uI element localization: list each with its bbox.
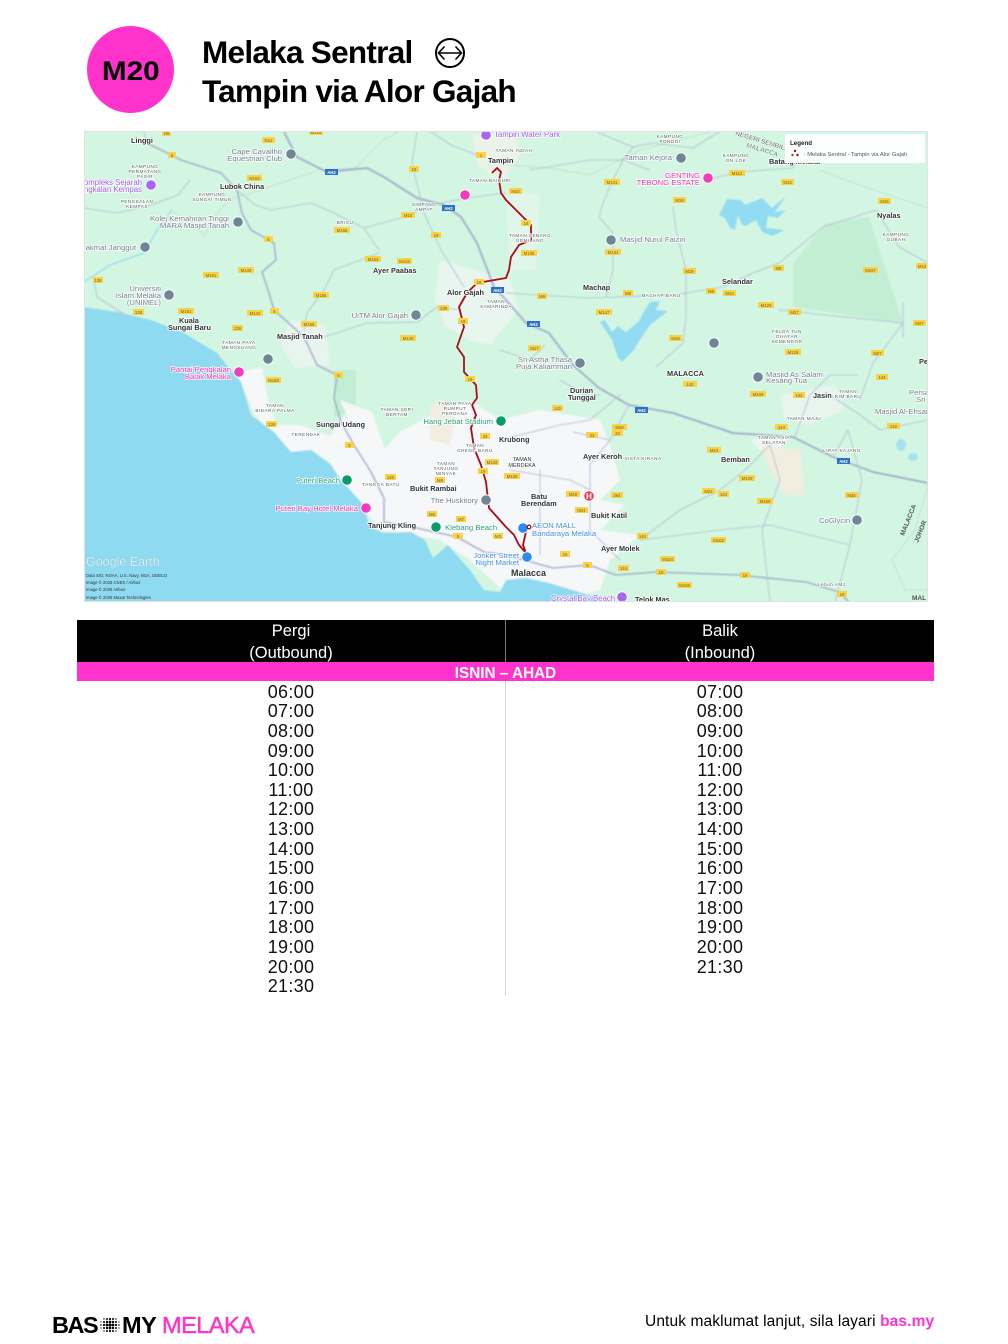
road shields: M132 — [399, 259, 410, 264]
footer logo: BAS.MY MELAKA — [52, 1312, 255, 1338]
map pins — [140, 130, 862, 602]
logo text: BAS: BAS — [52, 1312, 97, 1338]
place labels: BERTAM — [386, 412, 408, 417]
place labels: LIPAT KAJANG — [823, 448, 861, 453]
river — [84, 210, 172, 282]
road shields: 5 — [586, 563, 589, 568]
place labels: Krubong — [499, 435, 529, 444]
place labels: KEMPAS — [126, 204, 148, 209]
place labels: TANGGA BATU — [362, 482, 400, 487]
road shields: 144 — [778, 425, 786, 430]
road shields: M19 — [685, 269, 694, 274]
road shields: M8 — [776, 266, 782, 271]
sea — [84, 307, 606, 602]
place labels: SAMARINDA — [480, 304, 512, 309]
place labels: TANJUNG — [434, 466, 458, 471]
place labels: RIM BARU — [835, 394, 861, 399]
place labels: Balak Melaka — [185, 372, 232, 381]
road shields: M24 — [704, 489, 713, 494]
place labels: Puteri Bay Hotel Melaka — [276, 504, 359, 513]
road shields: M6 — [429, 512, 436, 517]
highway shields: AH2: AH2 — [444, 206, 453, 211]
inbound times: 17:00 — [697, 878, 743, 898]
reservoirs — [719, 196, 786, 236]
inbound times: 10:00 — [697, 741, 743, 761]
place labels: Klebang Beach — [445, 523, 497, 532]
road shields: 19 — [840, 592, 845, 597]
map legend — [785, 134, 925, 163]
road shields: 139 — [440, 306, 448, 311]
place labels: Masjid Nurul Faizin — [620, 235, 685, 244]
road shields: 19 — [477, 280, 482, 285]
place labels: BRISU — [337, 220, 353, 225]
road shields: M140 — [241, 268, 252, 273]
title: route name — [202, 34, 516, 108]
road shields: 33 — [483, 434, 488, 439]
road shields: 19 — [563, 552, 568, 557]
place labels: Batang Melaka — [769, 157, 821, 166]
road shields: 142 — [686, 382, 694, 387]
place labels: Pantai Pengkalan — [171, 365, 231, 374]
place labels: Bukit Rambai — [410, 484, 457, 493]
place labels: KAMPUNG — [883, 232, 909, 237]
outbound times: 07:00 — [268, 701, 314, 721]
road shields: M17 — [530, 346, 539, 351]
road shields: M104 — [662, 557, 673, 562]
outbound times: 08:00 — [268, 721, 314, 741]
place labels: TAMAN — [266, 403, 284, 408]
outbound times: 06:00 — [268, 682, 314, 702]
road shields: 5 — [273, 309, 276, 314]
place labels: TAMAN — [839, 389, 857, 394]
logo text: MELAKA: MELAKA — [162, 1312, 254, 1338]
place labels: Jonker Street — [473, 551, 520, 560]
place labels: Linggi — [131, 136, 153, 145]
place labels: KEMENDOR — [772, 339, 802, 344]
road shields: 138 — [268, 422, 276, 427]
road shields: M133 — [487, 460, 498, 465]
road shields: M131 — [608, 250, 619, 255]
outbound times: 15:00 — [268, 858, 314, 878]
road shields: M161 — [181, 309, 192, 314]
road shields: 144 — [720, 492, 728, 497]
road shields: 19 — [524, 221, 529, 226]
place labels: ON LOK — [726, 158, 747, 163]
road shields: 33 — [590, 433, 595, 438]
road shields: M19 — [671, 336, 680, 341]
place labels: BIDARA PALMA — [255, 408, 295, 413]
road shields: M159 — [268, 378, 279, 383]
place labels: Tunggal — [568, 393, 596, 402]
place labels: Nyalas — [877, 211, 901, 220]
road shields: M10 — [511, 189, 520, 194]
place labels: Kolej Kemahiran Tinggi — [150, 214, 229, 223]
road shields: M109 — [742, 476, 753, 481]
footer note: more information: Untuk maklumat lanjut, sila layari bas.my — [645, 1313, 934, 1330]
place labels: Jasin — [813, 391, 832, 400]
place labels: Bukit Katil — [591, 511, 627, 520]
place labels: MERDEKA — [508, 463, 536, 469]
inbound times: 13:00 — [697, 799, 743, 819]
Google Earth watermark and credits: Image © 2025 Airbus — [86, 587, 125, 592]
place labels: VISTA KIRANA — [624, 456, 662, 461]
road shields: 142 — [554, 406, 562, 411]
road shields: M8 — [625, 291, 632, 296]
inbound times — [697, 682, 743, 977]
place labels: TAMAN — [466, 443, 484, 448]
header: inbound: Balik — [702, 622, 738, 640]
Google Earth watermark and credits — [86, 555, 168, 600]
place labels: Malacca — [511, 568, 547, 578]
place labels: Night Market — [475, 558, 520, 567]
place labels: Equestrian Club — [227, 154, 282, 163]
road shields: 5 — [348, 443, 351, 448]
inbound times: 09:00 — [697, 721, 743, 741]
place labels: UiTM Alor Gajah — [352, 311, 408, 320]
inbound times: 12:00 — [697, 780, 743, 800]
map pins: H — [586, 492, 592, 501]
road shields: M128 — [507, 474, 518, 479]
place labels: PERDANA — [442, 411, 468, 416]
place labels: Sungai Baru — [168, 323, 211, 332]
road shields: M112 — [732, 171, 743, 176]
road shields: 144 — [878, 375, 886, 380]
inbound times: 15:00 — [697, 839, 743, 859]
place labels: TAMAN INDAH — [496, 148, 532, 153]
place labels: CoGlycin — [819, 516, 850, 525]
road shields: 19 — [461, 319, 466, 324]
urban areas — [235, 368, 640, 602]
place labels: Batu — [531, 492, 547, 501]
place labels: Ayer Keroh — [583, 452, 622, 461]
road shields: M129 — [788, 350, 799, 355]
place labels — [84, 130, 930, 604]
place labels: Masjid Tanah — [277, 332, 323, 341]
logo text: MY: MY — [122, 1312, 156, 1338]
place labels: GUBAH — [887, 237, 905, 242]
outbound times: 12:00 — [268, 799, 314, 819]
place labels: Alor Gajah — [447, 288, 484, 297]
inbound times: 18:00 — [697, 898, 743, 918]
inbound times: 20:00 — [697, 937, 743, 957]
highway shields: AH2: AH2 — [493, 288, 502, 293]
road shields: 138 — [135, 310, 143, 315]
place labels: TAMAN PAYA — [438, 401, 472, 406]
road shields: M167 — [865, 268, 876, 273]
place labels: Lebuh AMJ — [818, 582, 845, 587]
header: inbound — [685, 622, 755, 662]
road shields: M27 — [915, 321, 924, 326]
road shields: M109 — [760, 499, 771, 504]
road shields: M13 — [783, 180, 792, 185]
place labels: Durian — [570, 386, 593, 395]
route line: Melaka Sentral to Tampin — [457, 168, 531, 553]
road shields: 1 — [480, 153, 483, 158]
road shields: 33 — [615, 431, 620, 436]
place labels: Kuala — [179, 316, 200, 325]
roads — [284, 132, 928, 483]
place labels: FELDA TUN — [772, 329, 802, 334]
place labels: TAMAN — [487, 299, 505, 304]
outbound times: 16:00 — [268, 878, 314, 898]
road shields: M19 — [675, 198, 684, 203]
outbound times: 10:00 — [268, 760, 314, 780]
place labels: Islam Melaka — [116, 291, 162, 300]
place labels: AMPAT — [415, 207, 433, 212]
place labels: RUMPUT — [444, 406, 466, 411]
route badge: M20 — [87, 26, 174, 113]
place labels: PASIR — [137, 174, 153, 179]
column divider — [505, 620, 506, 662]
place labels: KAMPUNG — [199, 192, 225, 197]
title: route name: Tampin via Alor Gajah — [202, 72, 516, 108]
outbound times: 11:00 — [268, 780, 314, 800]
road shields: M8 — [437, 478, 444, 483]
road shields: M27 — [790, 310, 799, 315]
road shields: M142 — [250, 311, 261, 316]
days band: ISNIN – AHAD — [77, 662, 934, 681]
road shields: M29 — [569, 492, 578, 497]
road shields: M131 — [607, 180, 618, 185]
place labels: TERENDAK — [291, 432, 321, 437]
outbound times: 21:30 — [268, 976, 314, 996]
place labels: MALACCA — [667, 369, 705, 378]
place labels: GENTING — [665, 171, 700, 180]
inbound times: 21:30 — [697, 957, 743, 977]
place labels: TAMAN ASIA — [758, 435, 791, 440]
place labels: akmat Janggut — [86, 243, 137, 252]
place labels: SUNGAI TIMUN — [192, 197, 232, 202]
road shields: M155 — [316, 293, 327, 298]
place labels: Pe — [919, 357, 928, 366]
highway shields: AH2: AH2 — [839, 459, 848, 464]
road shields: 140 — [387, 475, 395, 480]
place labels: MENGKUANG — [222, 345, 256, 350]
road shields: M102 — [713, 538, 724, 543]
place labels: The Huskitory — [431, 496, 478, 505]
place labels: SELATAN — [762, 440, 786, 445]
place labels: Berendam — [521, 499, 557, 508]
road shields: M7 — [458, 517, 465, 522]
Google Earth watermark and credits: Google Earth — [86, 555, 160, 569]
inbound times: 07:00 — [697, 682, 743, 702]
road shields: 142 — [795, 393, 803, 398]
outbound times — [268, 682, 314, 996]
place labels: Lubok China — [220, 182, 265, 191]
highway shields: AH2: AH2 — [327, 170, 336, 175]
title: route name: Melaka Sentral — [202, 34, 413, 70]
place labels: TEBONG ESTATE — [637, 178, 700, 187]
Google Earth watermark and credits: Image © 2025 CNES / Airbus — [86, 580, 140, 585]
road shields: 19 — [434, 233, 439, 238]
road shields: 144 — [639, 534, 647, 539]
place labels: Tanjung Kling — [368, 521, 416, 530]
road shields: M3 — [495, 534, 502, 539]
highway shields: AH2 — [325, 169, 850, 464]
road shields: 5 — [337, 373, 340, 378]
road shields — [93, 130, 928, 597]
place labels: MARA Masjid Tanah — [160, 221, 229, 230]
road shields: M129 — [761, 303, 772, 308]
outbound times: 17:00 — [268, 898, 314, 918]
icon: dot grid — [100, 1318, 120, 1332]
road shields: M13 — [918, 264, 927, 269]
map legend: : Melaka Sentral - Tampin via Alor Gajah — [804, 152, 907, 158]
map legend: Legend — [790, 140, 812, 147]
road shields: M140 — [403, 336, 414, 341]
place labels: Machap — [583, 283, 611, 292]
place labels: TAMAN MAJU — [787, 416, 821, 421]
place labels: Sri Astha Thasa — [518, 355, 573, 364]
highway shields: AH2: AH2 — [637, 408, 646, 413]
place labels: SIMPANG — [412, 202, 436, 207]
header: outbound: (Outbound) — [249, 644, 333, 662]
header: outbound: Pergi — [272, 622, 310, 640]
place labels: Puteri Beach — [296, 476, 340, 485]
place labels: GEMILANG — [516, 238, 544, 243]
road shields: M153 — [368, 257, 379, 262]
place labels: MALACCA — [899, 503, 918, 537]
road shields: 19 — [412, 167, 417, 172]
place labels: TAMAN — [513, 457, 531, 463]
place labels: AEON MALL — [532, 521, 577, 530]
place labels: Bemban — [721, 455, 750, 464]
road shields: M25 — [847, 493, 856, 498]
road shields: M13 — [725, 291, 734, 296]
inbound times: 19:00 — [697, 917, 743, 937]
place labels: MAL — [912, 595, 926, 602]
place labels: Selandar — [722, 277, 753, 286]
route line terminus — [527, 525, 531, 529]
outbound times: 20:00 — [268, 957, 314, 977]
Google Earth watermark and credits: Image © 2025 Maxar Technologies — [86, 595, 151, 600]
place labels: Universiti — [129, 284, 161, 293]
place labels: Masjid As Salam — [766, 370, 823, 379]
Google Earth watermark and credits: Data SIO, NOAA, U.S. Navy, NGA, GEBCO — [86, 573, 168, 578]
place labels: CHENG BARU — [457, 448, 493, 453]
outbound times: 19:00 — [268, 937, 314, 957]
place labels: Sri — [916, 395, 926, 404]
route badge: M20: M20 — [102, 56, 159, 86]
inbound times: 08:00 — [697, 701, 743, 721]
road shields: M109 — [753, 392, 764, 397]
road shields: M27 — [873, 351, 882, 356]
road shields: 19 — [481, 469, 486, 474]
place labels: (UNIMEL) — [127, 298, 161, 307]
place labels: Kesang Tua — [766, 376, 808, 385]
place labels: MALACCA — [745, 142, 779, 159]
inbound times: 11:00 — [697, 760, 743, 780]
place labels: ngkalan Kempas — [84, 185, 142, 194]
place labels: KAMPUNG — [657, 134, 683, 139]
place labels: Sungai Udang — [316, 420, 365, 429]
place labels: PERMATANG — [129, 169, 161, 174]
road shields: 138 — [234, 326, 242, 331]
place labels: PENGKALAN — [121, 199, 153, 204]
road shields: 144 — [620, 566, 628, 571]
road shields: 5 — [267, 237, 270, 242]
place labels: ompleks Sejarah — [84, 178, 142, 187]
place labels: Ayer Paabas — [373, 266, 417, 275]
road shields: M155 — [337, 228, 348, 233]
road shields: 5 — [171, 153, 174, 158]
place labels: TAMAN SEBANG — [509, 233, 551, 238]
road shields: M31 — [577, 508, 586, 513]
inbound times: 14:00 — [697, 819, 743, 839]
road shields: M105 — [679, 583, 690, 588]
map border — [84, 132, 928, 602]
road shields: N9 — [164, 131, 170, 136]
place labels: TAMAN PAYA — [222, 340, 256, 345]
road shields: 142 — [890, 424, 898, 429]
outbound times: 14:00 — [268, 839, 314, 859]
road shields: 5 — [457, 534, 460, 539]
place labels: Ayer Molek — [601, 544, 641, 553]
road shields: M135 — [524, 251, 535, 256]
road shields: 19 — [468, 377, 473, 382]
place labels: PONDOI — [659, 139, 681, 144]
road shields: 19 — [659, 570, 664, 575]
place labels: Taman Kejora — [625, 153, 673, 162]
icon: two-way arrows — [435, 38, 465, 68]
place labels: GHAFAR — [776, 334, 798, 339]
place labels: Tampin — [488, 156, 513, 165]
outbound times: 18:00 — [268, 917, 314, 937]
road shields: 19 — [743, 573, 748, 578]
forest reserve — [793, 217, 903, 323]
road shields: M15 — [880, 199, 889, 204]
road shields: N12 — [265, 138, 273, 143]
road shields: M29 — [615, 425, 624, 430]
road shields: M13 — [710, 448, 719, 453]
place labels: MACHAP BARU — [641, 293, 681, 298]
road shields: M8 — [539, 294, 546, 299]
place labels: Bandaraya Melaka — [532, 529, 597, 538]
place labels: Cape Cavallho — [232, 147, 282, 156]
route map — [84, 131, 928, 602]
road shields: M161 — [206, 273, 217, 278]
place labels: Hang Jebat Stadium — [423, 417, 493, 426]
outbound times: 13:00 — [268, 819, 314, 839]
road shields: M155 — [304, 322, 315, 327]
place labels: Puja Kaliamman — [516, 362, 572, 371]
outbound times: 09:00 — [268, 741, 314, 761]
road shields: 264 — [613, 493, 621, 498]
road shields: M10 — [404, 213, 413, 218]
road shields: 138 — [94, 278, 102, 283]
place labels: MINYAK — [436, 471, 457, 476]
highway shields: AH2: AH2 — [529, 322, 538, 327]
timetable header: black bar — [77, 620, 934, 662]
inbound times: 16:00 — [697, 858, 743, 878]
place labels: KAMPUNG — [132, 164, 158, 169]
place labels: TAMAN — [437, 461, 455, 466]
road shields: N103 — [249, 176, 260, 181]
place labels: TAMAN SERI — [381, 407, 413, 412]
header: inbound: (Inbound) — [685, 644, 755, 662]
place labels: KAMPUNG — [723, 153, 749, 158]
place labels: TAMAN BAIDURI — [469, 178, 511, 183]
road shields: M147 — [599, 310, 610, 315]
header: outbound — [249, 622, 333, 662]
map base: land, water, urban areas and roads — [84, 131, 928, 602]
road shields: M8 — [708, 289, 715, 294]
